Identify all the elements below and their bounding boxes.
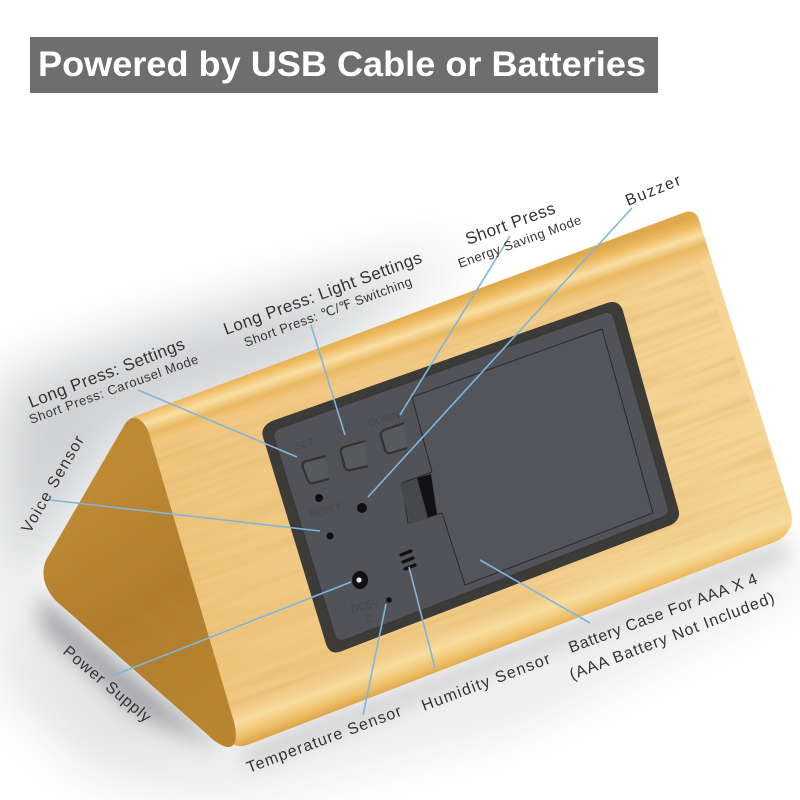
printed labels: C (364, 613, 374, 626)
label: battery case: Battery Case For AAA X 4 (566, 571, 760, 657)
clock: front wood face (110, 204, 800, 753)
title (30, 37, 658, 93)
label: long press light settings: Long Press: Light Settings (221, 248, 424, 339)
printed labels: DOWN (368, 410, 401, 430)
label: long press light settings: Short Press: ℃/℉ Switching (242, 274, 414, 350)
control panel (262, 302, 679, 652)
button: down (381, 423, 407, 453)
printed labels: DC5V (350, 597, 382, 616)
temperature hole (386, 597, 392, 603)
label: temperature sensor: Temperature Sensor (244, 703, 405, 777)
title: Powered by USB Cable or Batteries (38, 45, 646, 84)
latch (400, 474, 437, 524)
label: humidity sensor: Humidity Sensor (419, 651, 553, 715)
humidity slots (401, 551, 415, 569)
button: set (302, 456, 329, 483)
label: short press energy saving: Energy Saving Mode (456, 212, 583, 271)
background shading (0, 250, 790, 795)
button: up (341, 441, 368, 470)
buttons (302, 423, 407, 483)
label: long press settings: Long Press: Settings (26, 335, 187, 412)
reset hole (315, 494, 323, 502)
label: voice sensor: Voice Sensor (19, 433, 88, 536)
label: power supply: Power Supply (59, 643, 154, 726)
power socket (352, 571, 368, 589)
printed labels: RESET (308, 502, 343, 521)
label: short press energy saving: Short Press (463, 199, 558, 249)
voice sensor hole (326, 532, 334, 540)
label: buzzer: Buzzer (623, 172, 684, 210)
printed labels: SET (294, 437, 316, 453)
battery compartment (402, 329, 653, 585)
leader lines (50, 208, 632, 715)
panel: outer frame (262, 302, 679, 652)
clock: left wood face (43, 418, 236, 747)
panel: inner plate (274, 312, 668, 640)
label: battery case: (AAA Battery Not Included) (567, 590, 777, 684)
buzzer hole (357, 503, 367, 513)
printed labels: UP (336, 423, 353, 437)
printed labels (294, 410, 401, 626)
label: long press settings: Short Press: Carousel Mode (27, 352, 200, 427)
